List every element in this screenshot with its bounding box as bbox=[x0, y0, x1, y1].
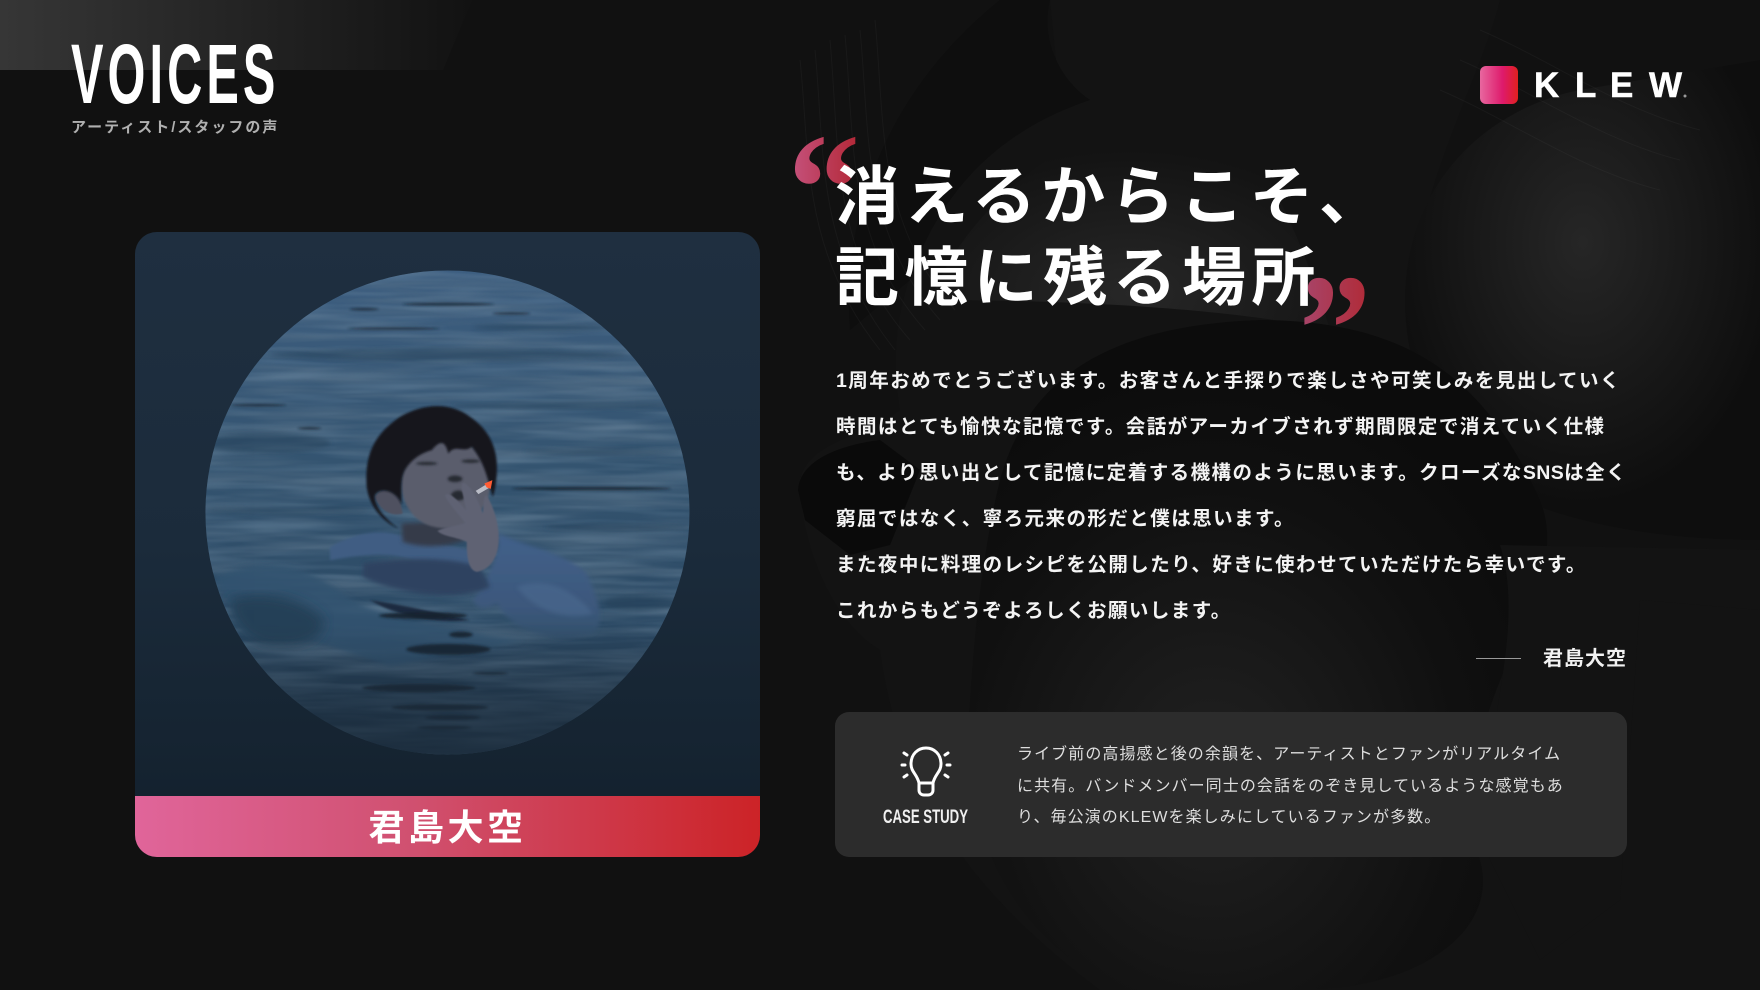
quote marks and headline decoration: “ bbox=[788, 102, 860, 274]
shirt bbox=[473, 534, 600, 638]
label: CASE STUDY: CASE STUDY bbox=[883, 806, 968, 828]
title: VOICES: VOICES bbox=[71, 27, 279, 120]
subtitle: アーティスト/スタッフの声 bbox=[71, 119, 279, 136]
quote marks and headline decoration bbox=[788, 102, 1371, 400]
photo: swimmer in water bbox=[205, 270, 690, 755]
logo: KLEW: KLEW bbox=[1534, 66, 1682, 105]
left swell bbox=[230, 566, 513, 662]
panel: artist photo card bbox=[135, 232, 760, 857]
hair bbox=[366, 406, 497, 528]
body text: 1周年おめでとうございます。お客さんと手探りで楽しさや可笑しみを見出していく bbox=[836, 370, 1621, 392]
body text: 窮屈ではなく、寧ろ元来の形だと僕は思います。 bbox=[836, 508, 1295, 530]
ear bbox=[375, 490, 403, 514]
name band: 君島大空 bbox=[368, 807, 526, 848]
body text bbox=[836, 370, 1627, 622]
body text: も、より思い出として記憶に定着する機構のように思います。クローズなSNSは全く bbox=[836, 462, 1627, 484]
cigarette bbox=[476, 484, 489, 494]
headline: 消えるからこそ、 bbox=[835, 161, 1388, 233]
neck bbox=[402, 520, 465, 546]
face bbox=[402, 438, 490, 528]
eyes, nose, mouth bbox=[416, 459, 480, 500]
name band bbox=[135, 796, 760, 857]
attribution: 君島大空 bbox=[1543, 648, 1627, 670]
headline: 記憶に残る場所 bbox=[835, 242, 1321, 314]
person bbox=[330, 406, 600, 638]
case study text: に共有。バンドメンバー同士の会話をのぞき見しているような感覚もあ bbox=[1017, 778, 1564, 795]
case study text: り、毎公演のKLEWを楽しみにしているファンが多数。 bbox=[1017, 809, 1441, 826]
panel: case study bbox=[835, 712, 1627, 857]
body text: これからもどうぞよろしくお願いします。 bbox=[836, 600, 1232, 622]
reflections bbox=[362, 612, 508, 730]
body text: 時間はとても愉快な記憶です。会話がアーカイブされず期間限定で消えていく仕様 bbox=[836, 416, 1606, 438]
hand bbox=[437, 483, 499, 572]
waves bbox=[204, 271, 692, 759]
body text: また夜中に料理のレシピを公開したり、好きに使わせていただけたら幸いです。 bbox=[836, 554, 1587, 576]
case study text: ライブ前の高揚感と後の余韻を、アーティストとファンがリアルタイム bbox=[1017, 746, 1561, 763]
headline bbox=[835, 161, 1388, 314]
